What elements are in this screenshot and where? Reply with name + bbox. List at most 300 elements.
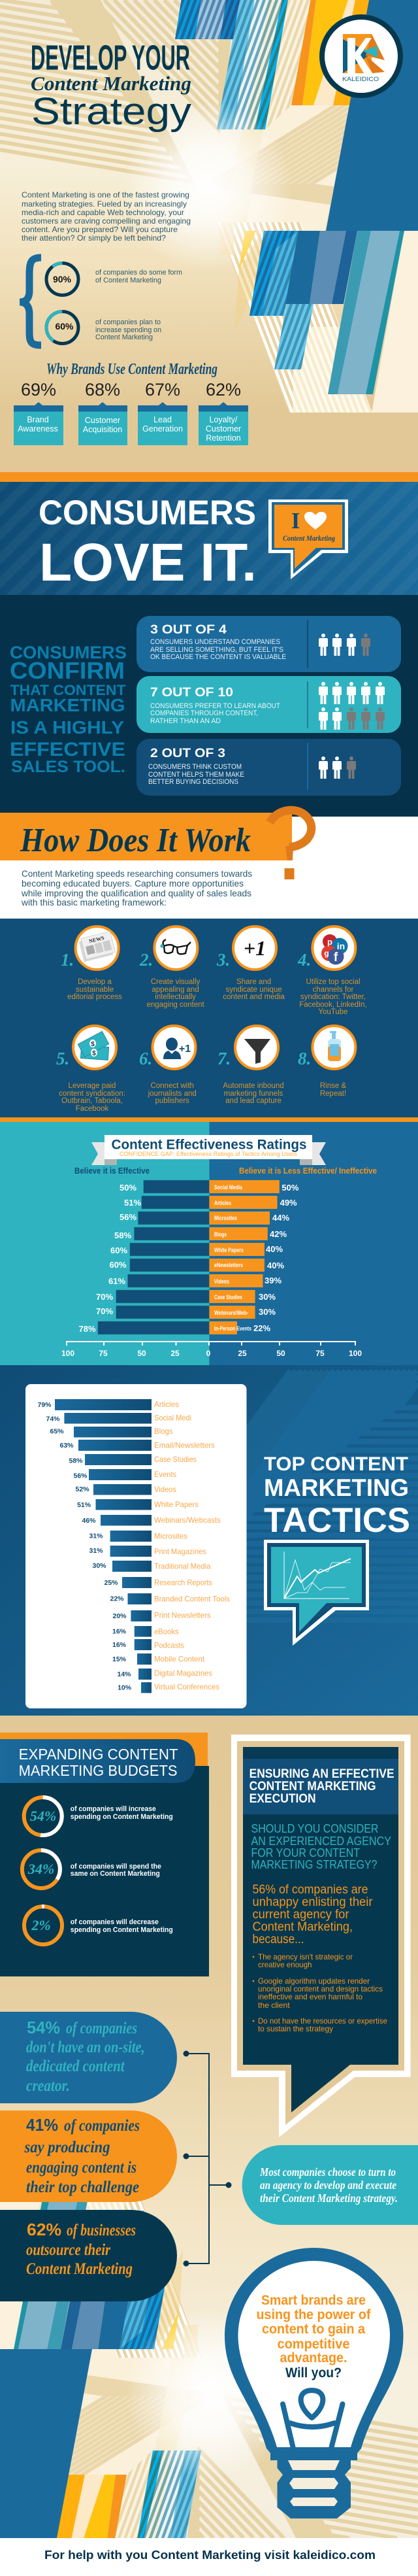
diverging bar chart: 40% <box>266 1244 283 1254</box>
heading: consumers confirm <box>10 643 127 776</box>
stat ring: 2%: 2% <box>31 1917 51 1933</box>
intro paragraph: Content Marketing is one of the fastest growing <box>22 190 189 199</box>
stat text: 2%: of companies will decrease <box>71 1918 159 1926</box>
icon: money: $ <box>91 1041 95 1048</box>
chart axis: 50 <box>276 1349 285 1358</box>
pill: 54% no dedicated creator <box>0 2012 177 2103</box>
ribbon heading <box>91 1135 326 1165</box>
title: Strategy <box>31 90 191 133</box>
stat text: 56% unhappy: Content Marketing, <box>252 1920 353 1934</box>
icon: plus one: +1 <box>244 936 266 960</box>
diverging bar chart: 56% <box>120 1212 137 1222</box>
hero glow <box>123 101 293 271</box>
step 2: appealing and <box>152 986 199 994</box>
stat ring: 2% <box>23 1905 63 1946</box>
pill: 62% outsource: of businesses <box>67 2222 136 2239</box>
card: 2 out of 3: BETTER BUYING DECISIONS <box>148 778 238 786</box>
text: how it works intro <box>21 868 252 907</box>
stat: customer acquisition: Customer <box>85 416 120 425</box>
panel: content effectiveness ratings <box>0 1122 418 1365</box>
icon: newspaper: NEWS <box>88 935 105 944</box>
bar labels: Mobile Content <box>154 1654 205 1663</box>
diverging bar chart: 50% <box>281 1183 299 1193</box>
stat text: 56% unhappy: current agency for <box>252 1908 349 1922</box>
panel: how does it work <box>0 817 418 919</box>
heading: expanding budgets <box>19 1746 178 1779</box>
panel: consumers love it <box>0 482 418 595</box>
pill: 54% no dedicated creator: creator. <box>26 2077 70 2095</box>
intro paragraph: customers are craving compelling and engaging <box>22 216 191 226</box>
step 2 <box>139 926 205 1009</box>
card: 3 out of 4: CONSUMERS UNDERSTAND COMPANIES <box>150 638 280 646</box>
step 7: Automate inbound <box>223 1082 284 1090</box>
diverging bar chart: 40% <box>267 1261 284 1270</box>
bar labels: Blogs <box>154 1427 173 1436</box>
stat text: 34% <box>71 1863 161 1878</box>
panel: consumers confirm <box>0 595 418 817</box>
step 1: sustainable <box>76 986 114 994</box>
diverging bar chart: Social Media <box>214 1184 243 1191</box>
stat text: 54%: spending on Content Marketing <box>71 1813 173 1821</box>
step 6 <box>139 1026 197 1105</box>
chart axis: 25 <box>238 1349 247 1358</box>
step 1: 1. <box>61 950 74 970</box>
callout: ensuring effective execution <box>231 1735 411 2137</box>
stat ring: 90% <box>40 257 85 301</box>
bar labels: Digital Magazines <box>154 1669 212 1678</box>
stat text: 60% <box>95 318 161 341</box>
bullet list: creative enough <box>258 1960 312 1969</box>
chart axis: 100 <box>349 1349 362 1358</box>
stat: loyalty <box>199 380 248 445</box>
heading: consumers confirm: IS A HIGHLY <box>10 717 124 737</box>
chart axis: 0 <box>206 1349 211 1358</box>
step 5: Outbrain, Taboola, <box>61 1097 123 1105</box>
icon: social networks: f <box>334 951 338 964</box>
question text: SHOULD YOU CONSIDER <box>251 1822 379 1835</box>
bar labels: Print Magazines <box>154 1547 206 1556</box>
step 5 <box>56 1026 125 1113</box>
card: 7 out of 10 <box>137 676 401 733</box>
heading: consumers confirm: MARKETING <box>10 695 125 715</box>
light bulb <box>225 2248 404 2518</box>
bullet list <box>253 1952 387 2033</box>
diverging bar chart: 70% <box>96 1306 113 1316</box>
heading band: how does it work: How Does It Work <box>20 822 251 859</box>
orange divider <box>0 472 418 482</box>
stat text: 90% <box>95 269 182 284</box>
heading: consumers confirm: THAT CONTENT <box>10 682 126 698</box>
pill: 62% outsource: outsource their <box>26 2241 110 2259</box>
stat: lead generation: Lead <box>153 415 172 424</box>
bar values: 74% <box>46 1415 60 1423</box>
stat text: 2% <box>71 1918 173 1934</box>
stat: brand awareness: 69% <box>21 380 56 399</box>
bar values: 10% <box>118 1684 132 1692</box>
stat text: 2%: spending on Content Marketing <box>71 1926 173 1934</box>
bullet list: Google algorithm updates render <box>258 1976 370 1986</box>
panel: top content marketing tactics background <box>0 1365 418 1716</box>
panel: framework steps <box>0 919 418 1117</box>
heading: consumers love it: CONSUMERS <box>39 494 256 532</box>
pill: 41% top challenge <box>0 2110 177 2202</box>
intro paragraph <box>22 190 191 243</box>
step 8: Rinse & <box>320 1082 346 1090</box>
footer geometric artwork <box>0 2167 418 2538</box>
pill: 41% top challenge: say producing <box>24 2139 110 2156</box>
heading: top content marketing tactics: TOP CONTENT <box>264 1453 408 1475</box>
stat: loyalty: 62% <box>206 380 241 399</box>
step 6: journalists and <box>148 1090 197 1098</box>
stat text: 60%: Content Marketing <box>95 333 153 341</box>
bar values: 65% <box>50 1428 64 1436</box>
step 1 <box>61 926 122 1001</box>
bar values: 56% <box>73 1472 88 1480</box>
logo: Kaleidico <box>322 17 400 95</box>
diverging bar chart <box>78 1180 299 1334</box>
pill: 41% top challenge: their top challenge <box>26 2178 139 2196</box>
step 4: YouTube <box>318 1008 348 1016</box>
icon: funnel <box>244 1039 270 1064</box>
stat ring: 90%: 90% <box>53 274 72 284</box>
stat: customer acquisition: Acquisition <box>83 425 122 434</box>
chart axis: 100 <box>61 1349 74 1358</box>
bullet list: Do not have the resources or expertise <box>258 2016 387 2025</box>
card: 2 out of 3 <box>137 739 401 796</box>
step 4: syndication: Twitter, <box>300 993 366 1001</box>
icon: I love content marketing speech bubble <box>268 500 348 579</box>
bar values: 52% <box>75 1485 89 1493</box>
step 3: Share and <box>236 978 271 986</box>
hero geometric artwork <box>0 0 418 413</box>
diverging bar chart: 61% <box>108 1276 125 1286</box>
stat text: 56% unhappy: because... <box>252 1933 304 1946</box>
diverging bar chart: 22% <box>253 1323 270 1333</box>
step 6: Connect with <box>150 1082 194 1090</box>
bullet list: unoriginal content and design tactics <box>258 1984 383 1993</box>
bar labels: Articles <box>154 1400 179 1409</box>
card: 2 out of 3: CONSUMERS THINK CUSTOM <box>148 763 242 771</box>
icon: chart speech bubble <box>264 1540 369 1646</box>
text: how it works intro: becoming educated buyers. Capture more opportunities <box>22 878 244 889</box>
diverging bar chart: 42% <box>270 1229 287 1239</box>
step 6: 6. <box>139 1049 152 1068</box>
logo: Kaleidico: KALEIDICO <box>342 76 379 83</box>
diverging bar chart: Webinars/Web- <box>214 1310 248 1317</box>
step 4: Facebook, LinkedIn, <box>299 1001 367 1009</box>
stat: customer acquisition <box>78 380 127 445</box>
bulb text: Smart brands are <box>261 2293 366 2308</box>
diverging bar chart: White Papers <box>214 1247 244 1254</box>
stat ring: 60%: 60% <box>55 321 74 331</box>
stat: loyalty: Retention <box>206 433 241 443</box>
diverging bar chart: 51% <box>124 1198 141 1208</box>
step 8 <box>298 1026 355 1098</box>
footer glow <box>125 2309 295 2479</box>
pill: 54% no dedicated creator: don't have an on-site, <box>26 2039 145 2056</box>
step 4: 4. <box>297 950 311 970</box>
card: 7 out of 10: RATHER THAN AN AD <box>150 717 221 725</box>
step 6: publishers <box>155 1097 189 1105</box>
step 4 <box>297 926 367 1016</box>
stat text: 90%: of Content Marketing <box>95 277 161 284</box>
bar values: 46% <box>82 1517 96 1525</box>
legend heading: effective: Believe it is Effective <box>74 1166 150 1176</box>
bar labels: eBooks <box>154 1627 179 1636</box>
stat: brand awareness: Awareness <box>18 424 58 433</box>
chart axis: 25 <box>170 1349 180 1358</box>
bullet list: the client <box>258 2001 290 2010</box>
heading: consumers confirm: CONSUMERS <box>10 643 127 662</box>
stat: loyalty: Loyalty/ <box>209 415 238 424</box>
icon: money: $ <box>92 1050 96 1057</box>
stat text: 56% unhappy: unhappy enlisting their <box>252 1895 373 1909</box>
icon: social networks: p <box>327 937 332 947</box>
diverging bar chart: 60% <box>110 1246 127 1255</box>
title: DEVELOP YOUR <box>31 38 190 77</box>
bullet list: ineffective and even harmful to <box>258 1992 362 2001</box>
bar labels: White Papers <box>154 1500 199 1509</box>
diverging bar chart: 49% <box>280 1198 297 1208</box>
step 2: 2. <box>139 950 153 970</box>
hero background <box>0 0 418 472</box>
heading: ensuring execution <box>249 1767 394 1806</box>
icon: money <box>78 1031 109 1060</box>
card: 3 out of 4: OK BECAUSE THE CONTENT IS VALUABLE <box>150 653 286 661</box>
pill: 54% no dedicated creator: of companies <box>66 2020 137 2037</box>
bar values: 51% <box>77 1501 91 1509</box>
bulb text: advantage. <box>280 2350 347 2365</box>
diverging bar chart: 78% <box>78 1324 96 1334</box>
step 7: and lead capture <box>225 1097 281 1105</box>
question text: MARKETING STRATEGY? <box>251 1858 378 1871</box>
card: 2 out of 3: 2 OUT OF 3 <box>150 746 225 760</box>
step 3: 3. <box>216 950 230 970</box>
bar labels: Social Medi <box>154 1414 191 1423</box>
bar values: 16% <box>112 1628 127 1636</box>
bulb text: competitive <box>277 2337 350 2352</box>
heading: top content marketing tactics: TACTICS <box>264 1501 410 1540</box>
diverging bar chart: 70% <box>96 1292 113 1302</box>
title: Content Marketing <box>31 72 191 95</box>
card: 7 out of 10: CONSUMERS PREFER TO LEARN ABOUT <box>150 702 280 710</box>
stat text: 56% unhappy <box>252 1883 373 1946</box>
bar values: 30% <box>92 1562 106 1570</box>
diverging bar chart: Microsites <box>214 1215 237 1222</box>
icon: social networks: in <box>337 941 345 951</box>
heading: expanding budgets: EXPANDING CONTENT <box>19 1746 178 1763</box>
stat: lead generation: Generation <box>142 424 183 433</box>
stat ring: 34% <box>22 1850 60 1888</box>
bulb text: Will you? <box>285 2365 342 2381</box>
heading: consumers confirm: EFFECTIVE <box>10 739 125 760</box>
diverging bar chart: 58% <box>114 1230 131 1240</box>
bar values: 25% <box>104 1579 118 1587</box>
pill: 62% outsource: 62% <box>27 2220 61 2239</box>
diverging bar chart: Case Studies <box>214 1294 242 1301</box>
card: 3 out of 4: ARE SELLING SOMETHING, BUT FEEL IT'S <box>150 646 283 654</box>
stat ring: 54% <box>24 1797 62 1835</box>
bar labels <box>154 1400 230 1691</box>
card: 7 out of 10: 7 OUT OF 10 <box>150 685 233 700</box>
card: 7 out of 10: COMPANIES THROUGH CONTENT, <box>150 709 258 717</box>
intro paragraph: media-rich and capable Web technology, your <box>22 208 184 217</box>
stat text: 34%: same on Content Marketing <box>71 1870 160 1878</box>
pill: 54% no dedicated creator: 54% <box>27 2018 60 2037</box>
stat ring: 54%: 54% <box>30 1808 56 1824</box>
stat text: 56% unhappy: 56% of companies are <box>252 1883 368 1897</box>
stat text: 60%: of companies plan to <box>95 318 161 326</box>
diverging bar chart: In-Person Events <box>214 1325 251 1332</box>
step 4: Utilize top social <box>306 978 361 986</box>
pill: 41% top challenge: 41% <box>26 2115 58 2135</box>
step 2: Create visually <box>151 978 201 986</box>
bar values: 20% <box>112 1612 127 1620</box>
pill: most companies choose an agency: an agency to develop and execute <box>260 2178 396 2192</box>
stat ring: 60% <box>40 305 85 350</box>
diverging bar chart: 39% <box>265 1276 281 1285</box>
bar values: 31% <box>89 1533 103 1540</box>
diverging bar chart: 44% <box>272 1213 289 1223</box>
step 7: marketing funnels <box>224 1090 283 1098</box>
diverging bar chart: Videos <box>214 1278 229 1285</box>
bar labels: Podcasts <box>154 1641 184 1650</box>
bar values: 15% <box>112 1655 127 1663</box>
step 1: Develop a <box>78 978 112 986</box>
intro paragraph: their attention? Or simply be left behind? <box>22 233 166 243</box>
chart axis: 50 <box>137 1349 146 1358</box>
chart axis: 75 <box>315 1349 325 1358</box>
heading: ensuring execution: ENSURING AN EFFECTIVE <box>249 1767 394 1781</box>
bulb text: content to gain a <box>262 2322 365 2337</box>
diverging bar chart: eNewsletters <box>214 1262 243 1269</box>
icon: I love content marketing speech bubble: Content Marketing <box>283 534 335 543</box>
heading: ensuring execution: EXECUTION <box>249 1792 316 1806</box>
intro paragraph: marketing strategies. Fueled by an increasingly <box>22 199 187 209</box>
stat text: 54% <box>71 1805 173 1821</box>
diverging bar chart: 50% <box>120 1183 137 1193</box>
icon: I love content marketing speech bubble: I <box>291 508 300 534</box>
icon: question mark <box>270 810 312 879</box>
bulb text <box>256 2293 371 2381</box>
bulb text: using the power of <box>256 2307 371 2322</box>
panel: why brands stats <box>14 380 248 445</box>
icon: social networks: g <box>324 949 329 958</box>
step 2: intellectually <box>155 993 196 1001</box>
icon: people 3 of 4 <box>319 634 370 656</box>
question text: AN EXPERIENCED AGENCY <box>251 1835 391 1848</box>
stat text: 60%: increase spending on <box>95 326 161 334</box>
panel: expanding budgets <box>0 1733 209 1976</box>
bar labels: Print Newsletters <box>154 1611 210 1620</box>
pill: most companies choose an agency: their Content Marketing strategy. <box>260 2192 398 2205</box>
step 7: 7. <box>217 1049 231 1068</box>
diverging bar chart: 30% <box>259 1292 276 1302</box>
ribbon heading: CONFIDENCE GAP: Effectiveness Ratings of Tactics Among Users <box>120 1151 297 1158</box>
intro paragraph: content. Are you prepared? Will you capture <box>22 225 178 234</box>
chart axis: 75 <box>99 1349 108 1358</box>
bar labels: Microsites <box>154 1531 187 1540</box>
step 5: content syndication: <box>59 1090 125 1098</box>
stat: lead generation <box>138 380 187 445</box>
bar values: 31% <box>89 1547 103 1555</box>
question text: FOR YOUR CONTENT <box>251 1846 360 1859</box>
icon: people 2 of 3 <box>319 756 356 779</box>
step 1: editorial process <box>67 993 122 1001</box>
stat: brand awareness: Brand <box>27 415 49 424</box>
icon: social networks <box>321 934 347 965</box>
orange divider <box>0 1117 418 1122</box>
step 4: channels for <box>313 986 353 994</box>
ribbon heading: Content Effectiveness Ratings <box>111 1138 307 1152</box>
bar labels: Virtual Conferences <box>154 1682 219 1691</box>
pill: 41% top challenge: engaging content is <box>26 2159 137 2177</box>
pill: 62% outsource: Content Marketing <box>26 2260 133 2278</box>
stat: lead generation: 67% <box>145 380 180 399</box>
heading: top content marketing tactics <box>264 1453 410 1540</box>
step 8: 8. <box>298 1049 311 1068</box>
legend heading: less effective: Believe it is Less Effective/ Ineffective <box>239 1166 377 1176</box>
connector lines <box>183 2050 231 2266</box>
bullet list: The agency isn't strategic or <box>258 1952 353 1961</box>
step 5: 5. <box>56 1049 69 1068</box>
stat ring: 34%: 34% <box>27 1861 54 1877</box>
text: how it works intro: with this basic marketing framework: <box>21 897 167 907</box>
heading: ensuring execution: CONTENT MARKETING <box>249 1780 376 1793</box>
text: how it works intro: while improving the qualification and quality of sales leads <box>21 888 251 898</box>
bar values: 14% <box>117 1670 131 1678</box>
heading: consumers love it: LOVE IT. <box>39 533 257 592</box>
bar values: 79% <box>37 1401 52 1409</box>
bar values <box>37 1401 132 1692</box>
card: 2 out of 3: CONTENT HELPS THEM MAKE <box>148 771 244 779</box>
bar labels: Email/Newsletters <box>154 1441 215 1450</box>
bar labels: Traditional Media <box>154 1561 211 1570</box>
footer band <box>0 2538 418 2576</box>
icon: glasses <box>161 940 191 954</box>
stat: brand awareness <box>14 380 63 445</box>
question text <box>251 1822 391 1871</box>
footer text: For help with you Content Marketing visit kaleidico.com <box>44 2549 376 2562</box>
bar values: 16% <box>112 1641 127 1649</box>
pill: 54% no dedicated creator: dedicated content <box>26 2058 125 2075</box>
heading: top content marketing tactics: MARKETING <box>264 1474 409 1501</box>
chart axis <box>61 1341 362 1358</box>
heading: expanding budgets: MARKETING BUDGETS <box>19 1762 178 1779</box>
stat text: 54%: of companies will increase <box>71 1805 156 1813</box>
stat text: 34%: of companies will spend the <box>71 1863 161 1871</box>
bar labels: Case Studies <box>154 1455 197 1464</box>
diverging bar chart: Blogs <box>214 1231 227 1238</box>
diverging bar chart: 60% <box>109 1260 127 1270</box>
bar labels: Videos <box>154 1485 176 1494</box>
brace <box>20 258 41 345</box>
lower section background <box>0 1716 418 2538</box>
step 7 <box>217 1026 284 1105</box>
bar values: 58% <box>69 1457 83 1465</box>
stat: loyalty: Customer <box>206 424 241 433</box>
icon: add contact: +1 <box>179 1043 191 1055</box>
step 8: Repeat! <box>320 1090 346 1098</box>
bar labels: Events <box>154 1470 176 1479</box>
bar values: 63% <box>59 1442 74 1449</box>
bullet list: to sustain the strategy <box>258 2024 333 2033</box>
horizontal bars <box>55 1399 152 1693</box>
panel: tactics bar chart <box>25 1384 247 1708</box>
bar labels: Branded Content Tools <box>154 1594 230 1603</box>
step 3: syndicate unique <box>225 986 282 994</box>
stat text: 90%: of companies do some form <box>95 269 182 277</box>
